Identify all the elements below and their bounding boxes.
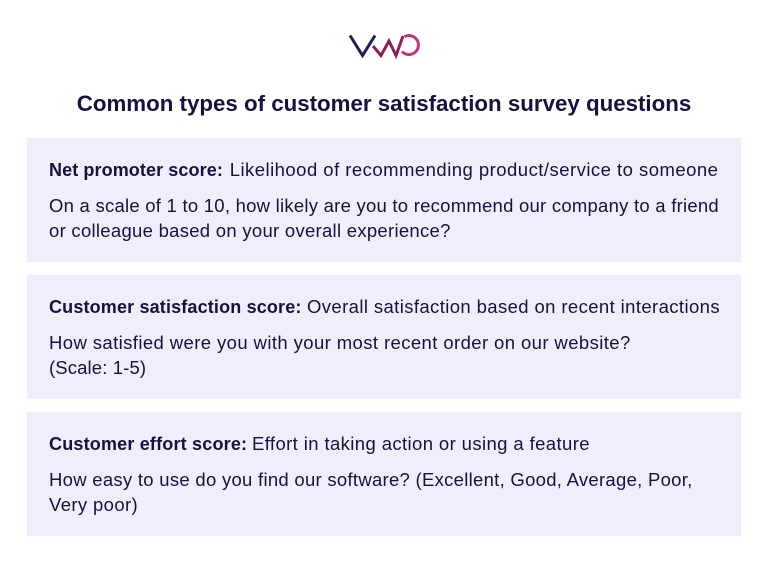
heading: customer satisfaction score: Overall satisfaction based on recent interactions bbox=[307, 296, 720, 317]
logo: VWO bbox=[348, 34, 420, 60]
heading: customer effort score: Effort in taking action or using a feature bbox=[252, 433, 590, 454]
heading: customer effort score bbox=[49, 433, 590, 454]
panel: customer effort score bbox=[27, 412, 741, 536]
question text: customer effort score: How easy to use do you find our software? (Excellent, Good, Average, Poor, bbox=[49, 469, 693, 490]
question text: customer satisfaction score: (Scale: 1-5) bbox=[49, 357, 146, 378]
panel: net promoter score bbox=[27, 138, 741, 262]
heading: customer effort score: Customer effort score: bbox=[49, 434, 247, 454]
heading: customer satisfaction score bbox=[49, 296, 720, 317]
question text: net promoter score bbox=[49, 195, 719, 241]
question text: customer satisfaction score: How satisfied were you with your most recent order on our website? bbox=[49, 332, 631, 353]
question text: customer satisfaction score bbox=[49, 332, 631, 378]
title: Common types of customer satisfaction survey questions bbox=[77, 91, 691, 116]
question text: net promoter score: On a scale of 1 to 10, how likely are you to recommend our company to a friend bbox=[49, 195, 719, 216]
question text: customer effort score: Very poor) bbox=[49, 494, 138, 515]
heading: net promoter score: Net promoter score: bbox=[49, 160, 223, 180]
heading: net promoter score: Likelihood of recommending product/service to someone bbox=[230, 159, 718, 180]
question text: net promoter score: or colleague based on your overall experience? bbox=[49, 220, 451, 241]
heading: customer satisfaction score: Customer satisfaction score: bbox=[49, 297, 302, 317]
question text: customer effort score bbox=[49, 469, 693, 515]
panel: customer satisfaction score bbox=[27, 275, 741, 399]
